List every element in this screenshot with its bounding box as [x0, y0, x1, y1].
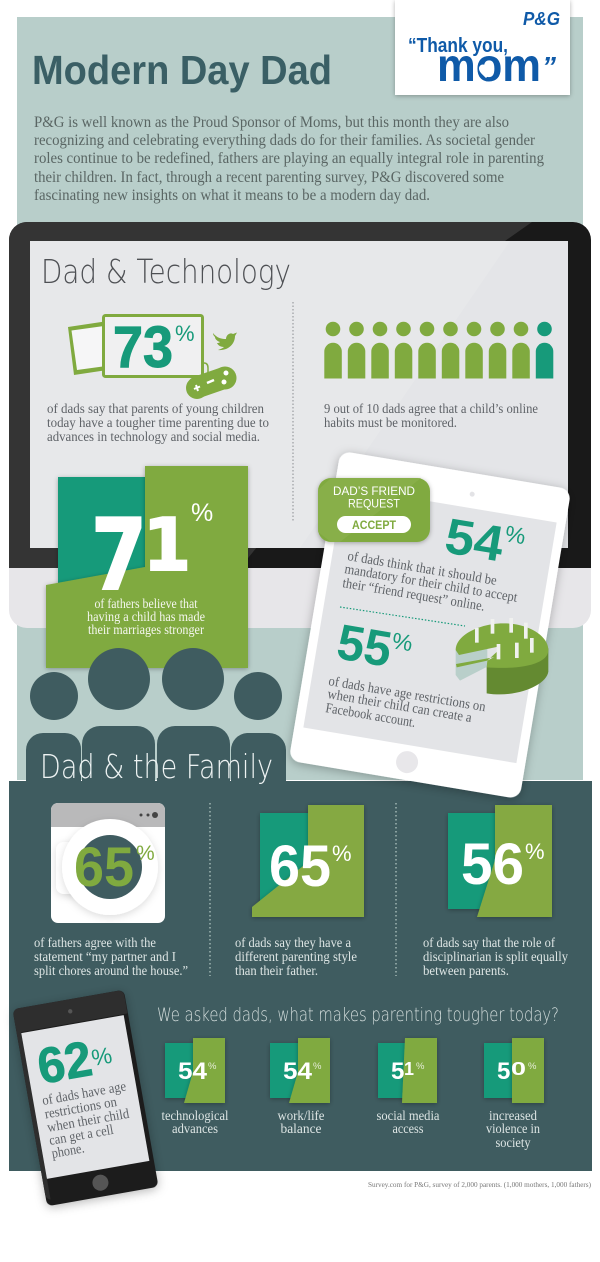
- stat: 62 percent: 62: [33, 1030, 96, 1095]
- divider: [292, 302, 294, 521]
- stat block: 71 percent: %: [191, 499, 213, 527]
- text: 73 percent caption: today have a tougher time parenting due to: [47, 416, 269, 431]
- stat: 73 percent device icons: [68, 315, 237, 399]
- stat: 50 percent increased violence: 0: [511, 1059, 526, 1079]
- intro text: [34, 114, 544, 204]
- phone with 62 percent stat: %: [89, 1042, 114, 1071]
- text: phone caption: [41, 1079, 130, 1162]
- stat: 51 percent social media access: access: [392, 1122, 424, 1137]
- text: phone caption: when their child: [46, 1107, 130, 1136]
- text: parenting style caption: [235, 936, 357, 979]
- logo: P&G Thank you, mom: [395, 0, 570, 95]
- stat: 54 percent technological advances: advances: [172, 1122, 218, 1137]
- text: disciplinarian caption: [423, 936, 568, 979]
- intro text: P&G is well known as the Proud Sponsor of Moms, but this month they are also: [34, 114, 509, 131]
- stat block: 71 percent: 7: [91, 499, 147, 613]
- divider: [209, 803, 211, 976]
- stat block: 65 percent: %: [332, 841, 352, 866]
- stat block: 56 percent: 56: [461, 832, 524, 897]
- stat: 50 percent increased violence: %: [528, 1061, 537, 1072]
- text: disciplinarian caption: of dads say that the role of: [423, 936, 555, 951]
- intro text: fascinating new insights on what it means to be a modern day dad.: [34, 187, 430, 204]
- icon: washing machine 65 percent: 65: [74, 835, 134, 898]
- stat: 54 percent work/life balance: work/life: [278, 1109, 324, 1124]
- stat: 55 percent: Facebook account.: [324, 701, 417, 731]
- stat: 54 percent work/life balance: balance: [280, 1122, 322, 1137]
- text: phone caption: can get a cell: [48, 1123, 115, 1149]
- stat: 54 percent technological advances: %: [208, 1061, 217, 1072]
- stat block: 71 percent: their marriages stronger: [88, 623, 204, 638]
- text: 73 percent caption: advances in technology and social media.: [47, 430, 260, 445]
- stat: 55 percent: %: [390, 627, 415, 656]
- badge: friend request: [318, 478, 430, 542]
- badge: friend request: REQUEST: [348, 496, 401, 510]
- text: 9 out of 10 caption: habits must be monitored.: [324, 416, 457, 431]
- phone body: [12, 990, 159, 1206]
- stat block: 65 percent: 65: [269, 834, 331, 899]
- stat block: 71 percent: [46, 466, 248, 668]
- icon: game controller: [186, 363, 236, 399]
- pictogram: 9 out of 10 dads: [324, 322, 553, 378]
- icon: screen with number: [104, 315, 202, 380]
- intro text: their children. In fact, through a recent parenting survey, P&G discovered some: [34, 169, 504, 186]
- text: 73 percent caption: [47, 402, 269, 445]
- stat: 54 percent: %: [503, 520, 528, 549]
- logo: P&G Thank you, mom: ”: [542, 51, 556, 82]
- stat: 54 percent: 54: [441, 508, 508, 572]
- intro text: roles continue to be redefined, fathers are playing an equally integral role in parenting: [34, 150, 544, 167]
- text: phone caption: restrictions on: [44, 1095, 118, 1122]
- icon: twitter bird: [213, 332, 237, 350]
- badge: friend request: DAD’S FRIEND: [333, 484, 415, 498]
- stat: 50 percent increased violence: [484, 1038, 544, 1151]
- text: chores caption: [34, 936, 188, 979]
- heading: Dad & the Family: Dad & the Family: [40, 747, 273, 786]
- stat block: 56 percent: [448, 805, 552, 917]
- text: 9 out of 10 caption: 9 out of 10 dads agree that a child’s online: [324, 402, 538, 417]
- logo: P&G Thank you, mom: “Thank you,: [408, 35, 508, 57]
- icon: family group: [26, 648, 286, 785]
- stat: 51 percent social media access: 5: [391, 1058, 404, 1085]
- title: Modern Day Dad: [32, 47, 332, 93]
- stat: 51 percent social media access: [376, 1038, 440, 1137]
- tablet body: [289, 451, 571, 799]
- panel: Dad & the Family: [9, 781, 592, 1171]
- stat: 55 percent: 55: [333, 614, 396, 678]
- stat: 51 percent social media access: social media: [376, 1109, 440, 1124]
- stat: 55 percent: when their child can create a: [326, 687, 474, 726]
- stat block: 71 percent: 1: [143, 503, 191, 587]
- stat: 54 percent technological advances: 54: [178, 1058, 208, 1085]
- stat: 54 percent work/life balance: %: [313, 1061, 322, 1072]
- footnote: Survey.com for P&G, survey of 2,000 parents. (1,000 mothers, 1,000 fathers): [368, 1180, 591, 1189]
- stat: 51 percent social media access: %: [416, 1061, 425, 1072]
- text: phone caption: phone.: [51, 1141, 86, 1162]
- text: parenting style caption: of dads say they have a: [235, 936, 352, 951]
- text: parenting style caption: than their father.: [235, 964, 318, 979]
- text: chores caption: of fathers agree with the: [34, 936, 156, 951]
- intro text: recognizing and celebrating everything dads do for their families. As societal gender: [34, 132, 536, 149]
- stat: 50 percent increased violence: increased: [489, 1109, 537, 1124]
- stat block: 71 percent: of fathers believe that: [94, 597, 198, 612]
- sage background panel: [17, 17, 583, 780]
- stat: 54 percent technological advances: technological: [162, 1109, 229, 1124]
- badge: friend request: ACCEPT: [352, 520, 396, 532]
- text: 9 out of 10 caption: [324, 402, 538, 431]
- text: disciplinarian caption: between parents.: [423, 964, 509, 979]
- stat: 55 percent: of dads have age restrictions on: [327, 674, 487, 715]
- stat block: 71 percent: having a child has made: [87, 610, 205, 625]
- icon: washing machine 65 percent: %: [136, 842, 155, 865]
- tablet with stats: [289, 451, 571, 799]
- stat block: 65 percent: [252, 805, 364, 917]
- stat: 54 percent technological advances: [162, 1038, 229, 1137]
- icon: screen with number: %: [175, 321, 195, 346]
- logo: P&G Thank you, mom: P&G: [523, 9, 560, 29]
- divider: [395, 803, 397, 976]
- stat: 51 percent social media access: 1: [404, 1059, 414, 1079]
- text: phone caption: of dads have age: [41, 1079, 127, 1109]
- icon: tablet: [68, 321, 114, 375]
- divider: [340, 607, 465, 626]
- text: 73 percent caption: of dads say that parents of young children: [47, 402, 264, 417]
- stat: 54 percent: of dads think that it should be: [346, 549, 498, 589]
- stat: 54 percent work/life balance: [270, 1038, 330, 1137]
- stat: 54 percent: [341, 508, 528, 615]
- text: chores caption: split chores around the house.”: [34, 964, 188, 979]
- stat block: 56 percent: %: [525, 839, 545, 864]
- text: chores caption: statement “my partner and I: [34, 950, 176, 965]
- stat: 55 percent: [324, 614, 487, 731]
- phone with 62 percent stat: [12, 990, 159, 1206]
- text: parenting style caption: different parenting style: [235, 950, 357, 965]
- text: disciplinarian caption: disciplinarian is split equally: [423, 950, 568, 965]
- icon: birthday cake: [456, 618, 548, 694]
- stat: 54 percent: their “friend request” online.: [341, 576, 486, 615]
- stat: 50 percent increased violence: society: [496, 1136, 530, 1151]
- icon: washing machine 65 percent: [51, 803, 165, 923]
- stat: 50 percent increased violence: 5: [497, 1058, 510, 1085]
- stat: 50 percent increased violence: violence in: [486, 1122, 540, 1137]
- heading: Dad & Technology: Dad & Technology: [41, 252, 291, 291]
- stat: 54 percent: mandatory for their child to accept: [343, 562, 519, 606]
- icon: screen with number: 73: [113, 315, 173, 380]
- logo: P&G Thank you, mom: mom: [437, 39, 541, 91]
- stat: 54 percent work/life balance: 54: [283, 1058, 313, 1085]
- panel: monitor: [9, 222, 591, 628]
